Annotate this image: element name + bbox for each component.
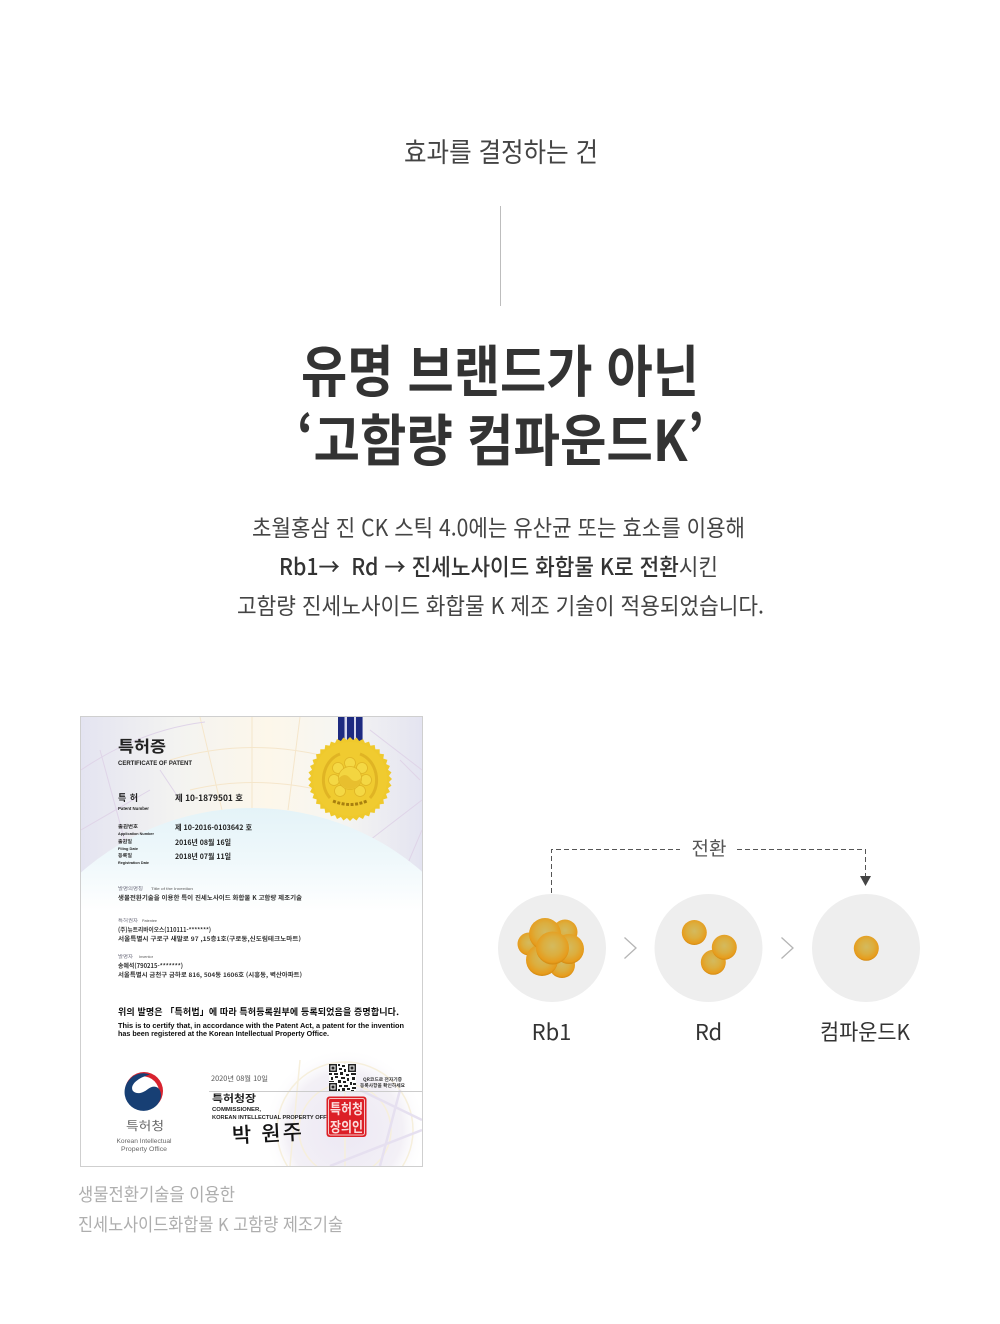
description text (237, 509, 764, 621)
circle: compound K molecule (812, 894, 920, 1002)
commissioner block: KOREAN INTELLECTUAL PROPERTY OFFICE (212, 1115, 336, 1121)
description text: 초월홍삼 진 CK 스틱 4.0에는 유산균 또는 효소를 이용해 (252, 509, 745, 543)
certificate invention and applicant details: 서울특별시 금천구 금하로 816, 504동 1606호 (시흥동, 벽산아파트) (118, 970, 302, 979)
official red seal: 특허청 (330, 1099, 363, 1119)
certificate statement: has been registered at the Korean Intellectual Property Office. (118, 1029, 329, 1038)
conversion label: 전환 (692, 834, 726, 861)
certificate invention and applicant details: 발명자 (118, 953, 134, 960)
certificate header: 제 10-1879501 호 (175, 792, 243, 804)
patent office name: 특허청 (126, 1117, 164, 1134)
molecule labels: 컴파운드K (820, 1015, 911, 1047)
certificate registration details: 2016년 08월 16일 (175, 838, 231, 848)
certificate registration details: Registration Date (118, 861, 149, 865)
commissioner block (209, 1074, 422, 1121)
patent office name (116, 1117, 172, 1153)
molecule labels (532, 1015, 911, 1047)
certificate registration details: Application Number (118, 832, 155, 836)
certificate statement: 위의 발명은 「특허법」에 따라 특허등록원부에 등록되었음을 증명합니다. (118, 1005, 399, 1018)
commissioner block: 2020년 08월 10일 (211, 1074, 268, 1084)
QR code (329, 1064, 356, 1091)
commissioner block: 특허청장 (212, 1090, 256, 1105)
icon: gold seal with ribbon (308, 717, 392, 821)
molecule labels: Rd (695, 1015, 722, 1047)
patent office name: Korean Intellectual (116, 1139, 172, 1145)
main title: 유명 브랜드가 아닌 (301, 328, 699, 409)
icon: patent office logo (125, 1072, 163, 1111)
certificate invention and applicant details: 송예석(790215-*******) (118, 961, 183, 970)
chevron arrow 2 (782, 938, 793, 958)
certificate registration details: 제 10-2016-0103642 호 (175, 823, 252, 833)
molecule labels: Rb1 (532, 1015, 571, 1047)
certificate registration details (118, 823, 252, 865)
certificate invention and applicant details: 생물전환기술을 이용한 특이 진세노사이드 화합물 K 고함량 제조기술 (118, 893, 302, 902)
certificate registration details: 등록일 (118, 852, 132, 859)
certificate caption (78, 1181, 343, 1237)
certificate invention and applicant details: 발명의명칭 (118, 885, 143, 892)
main title (297, 328, 704, 478)
eyebrow heading: 효과를 결정하는 건 (404, 131, 598, 170)
official red seal: 장의인 (330, 1117, 363, 1137)
patent office name: Property Office (121, 1147, 168, 1153)
chevron arrow 1 (624, 938, 636, 958)
certificate header: 특허증 (118, 733, 166, 757)
certificate caption: 생물전환기술을 이용한 (78, 1181, 235, 1207)
description text: Rb1→ Rd → 진세노사이드 화합물 K로 전환시킨 (279, 548, 718, 582)
certificate invention and applicant details: 특허권자 (118, 917, 139, 924)
certificate statement: This is to certify that, in accordance with the Patent Act, a patent for the invention (118, 1021, 404, 1030)
certificate registration details: Filing Date (118, 847, 138, 851)
conversion dashed arrow (552, 850, 871, 893)
circle: Rd molecule (654, 894, 762, 1002)
vertical divider line (500, 206, 501, 306)
circle: Rb1 molecule (498, 894, 606, 1002)
certificate invention and applicant details: Patentee (142, 919, 157, 923)
certificate registration details: 출원번호 (118, 823, 139, 830)
certificate statement (118, 1005, 404, 1038)
certificate invention and applicant details: Inventor (139, 955, 154, 959)
official red seal (326, 1096, 366, 1137)
main title: ‘고함량 컴파운드K’ (297, 397, 704, 478)
commissioner block: COMMISSIONER, (212, 1107, 261, 1113)
certificate header: CERTIFICATE OF PATENT (118, 760, 192, 767)
description text: 고함량 진세노사이드 화합물 K 제조 기술이 적용되었습니다. (237, 587, 764, 621)
certificate caption: 진세노사이드화합물 K 고함량 제조기술 (78, 1211, 343, 1237)
QR caption: 등록사항을 확인하세요 (360, 1082, 406, 1089)
certificate header (118, 733, 243, 811)
certificate header: 특 허 (118, 791, 138, 804)
certificate header: Patent Number (118, 806, 149, 811)
signature: 박 원주 (231, 1116, 303, 1150)
patent certificate (80, 716, 423, 1167)
certificate registration details: 2018년 07월 11일 (175, 852, 231, 862)
certificate registration details: 출원일 (118, 838, 132, 845)
QR caption: QR코드로 전자기증 (363, 1076, 403, 1083)
certificate background (81, 717, 422, 1166)
certificate invention and applicant details: Title of the Invention (151, 887, 193, 891)
certificate invention and applicant details (118, 885, 302, 979)
certificate invention and applicant details: 서울특별시 구로구 새말로 97 ,15층1호(구로동,신도림테크노마트) (118, 934, 301, 943)
certificate invention and applicant details: (주)뉴트리바이오스(110111-*******) (118, 925, 211, 934)
icon: arrowhead (860, 876, 871, 886)
QR caption (360, 1076, 406, 1089)
